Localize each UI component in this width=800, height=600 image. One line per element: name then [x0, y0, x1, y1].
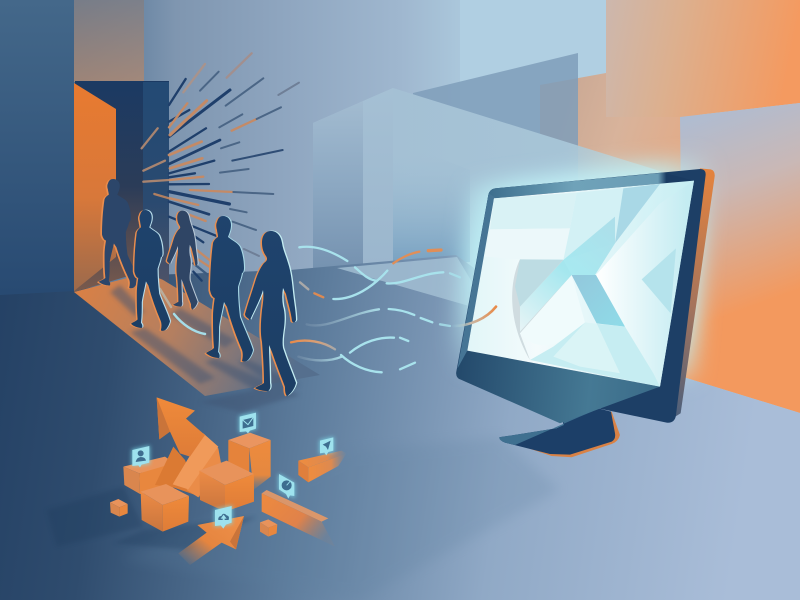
body [456, 169, 706, 423]
doorway [74, 81, 169, 292]
upper right facet [563, 188, 623, 260]
building column 3 [393, 140, 470, 268]
front cube [141, 484, 189, 532]
small chevron [642, 248, 676, 313]
left low box [123, 457, 177, 494]
small cube left [110, 499, 128, 517]
light blue back block [460, 0, 606, 200]
top bezel [487, 173, 694, 205]
right low box [298, 451, 347, 482]
icon: paper plane tag [319, 437, 334, 455]
left wall [0, 0, 74, 295]
door interior [74, 81, 169, 292]
ground shadows [47, 487, 257, 550]
haze beam toward monitor [313, 88, 663, 275]
building column 1 [313, 101, 363, 270]
back tall box [228, 433, 271, 490]
data waves [291, 247, 496, 372]
door orange side panel [74, 83, 116, 291]
icon: person tag [132, 445, 150, 467]
crescent [512, 259, 572, 360]
bottom bezel [456, 351, 660, 423]
orange light spill on floor [74, 272, 320, 396]
floor arcs by the feet [160, 289, 205, 334]
lower right wall [680, 103, 800, 413]
orange back edge [670, 168, 715, 420]
center cube [199, 461, 254, 512]
big up arrow [155, 397, 222, 497]
top block above door [74, 0, 144, 82]
person 2 [129, 210, 171, 331]
person shadows [110, 285, 300, 412]
back dark block [413, 53, 578, 200]
person 1 [97, 179, 139, 289]
blue band [572, 275, 625, 327]
monitor [456, 168, 715, 457]
stand [499, 398, 620, 457]
person 4 [204, 216, 254, 362]
left bezel [457, 193, 495, 373]
pale bands [490, 193, 577, 229]
peach wall panel [540, 73, 700, 210]
long bar [262, 490, 335, 547]
orange boxes and arrows cluster [47, 397, 347, 565]
stand cast shadow [120, 437, 560, 600]
light burst lines [142, 53, 299, 281]
small cube right [260, 519, 277, 537]
icon: envelope tag [239, 412, 257, 433]
icon: upload tag [214, 505, 232, 529]
person 5 [243, 231, 297, 396]
floor [0, 255, 800, 600]
person 3 [166, 210, 199, 310]
building column 2 [363, 88, 393, 270]
cyan diagonal [520, 217, 615, 332]
orange back wall [606, 0, 800, 117]
bottom arrow [178, 516, 244, 565]
chevron [596, 181, 694, 387]
icon: pie chart tag [278, 473, 295, 499]
screen [467, 181, 694, 387]
light floor wedge [337, 257, 490, 312]
monitor glow [450, 155, 710, 380]
door right jamb [143, 82, 169, 282]
